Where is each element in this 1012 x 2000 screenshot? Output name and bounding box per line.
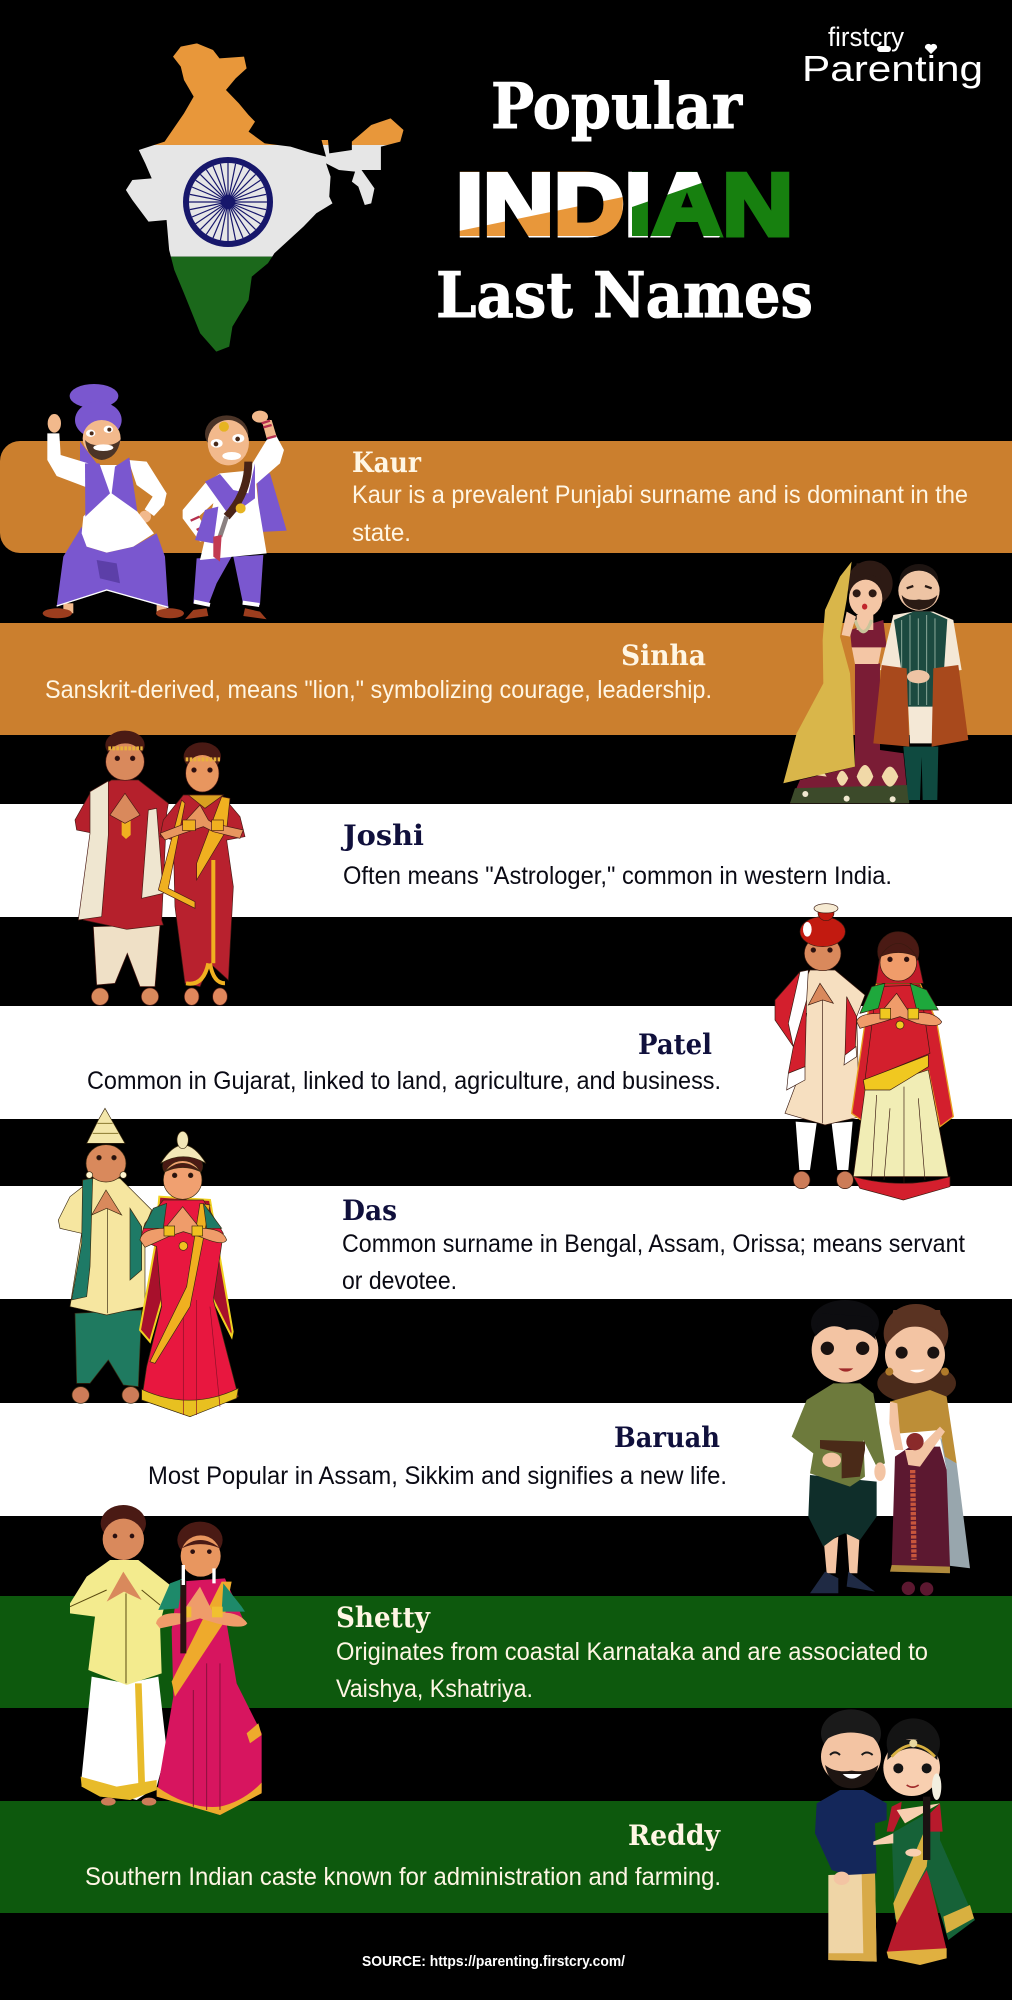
heading: Reddy: Reddy bbox=[628, 1819, 721, 1852]
man bbox=[873, 564, 968, 800]
title word: INDIAN: INDIAN bbox=[456, 155, 793, 254]
title: Last Names bbox=[436, 258, 813, 332]
logo: firstcry parenting: firstcry bbox=[828, 22, 904, 52]
panel: Joshi bbox=[0, 804, 1012, 917]
woman bbox=[877, 1304, 970, 1596]
woman bbox=[873, 1718, 975, 1965]
text: Reddy description: Southern Indian caste known for administration and farming. bbox=[85, 1863, 721, 1891]
illustration: Baruah couple bbox=[792, 1300, 970, 1596]
woman bbox=[783, 561, 909, 803]
woman bbox=[852, 932, 953, 1200]
man bbox=[75, 731, 168, 1005]
illustration: Reddy couple bbox=[815, 1709, 975, 1965]
man bbox=[775, 904, 865, 1189]
man bbox=[70, 1505, 170, 1806]
heading: Joshi: Joshi bbox=[340, 819, 424, 852]
logo: firstcry parenting: Parenting bbox=[802, 48, 983, 89]
man bbox=[815, 1709, 887, 1962]
text: Patel description: Common in Gujarat, linked to land, agriculture, and business. bbox=[87, 1067, 721, 1095]
panel: Kaur bbox=[0, 441, 1012, 553]
illustration: Sinha couple bbox=[783, 561, 968, 803]
heading: Sinha: Sinha bbox=[621, 639, 706, 672]
man bbox=[43, 384, 184, 618]
text: Baruah description: Most Popular in Assam, Sikkim and signifies a new life. bbox=[148, 1462, 727, 1490]
panel: Baruah bbox=[0, 1403, 1012, 1516]
illustration: Das couple bbox=[58, 1108, 238, 1417]
title bbox=[436, 69, 813, 332]
panel: Das bbox=[0, 1186, 1012, 1299]
India flag map bbox=[126, 43, 404, 352]
text: Das description: or devotee. bbox=[342, 1267, 457, 1295]
source: SOURCE: https://parenting.firstcry.com/ bbox=[362, 1953, 626, 1970]
title: Popular bbox=[491, 69, 743, 143]
panel: Reddy bbox=[0, 1801, 1012, 1913]
panel: Sinha bbox=[0, 623, 1012, 735]
icon: Ashoka Chakra bbox=[186, 160, 270, 244]
text: Shetty description: Vaishya, Kshatriya. bbox=[336, 1675, 533, 1703]
heading: Kaur: Kaur bbox=[352, 446, 422, 479]
man bbox=[792, 1300, 886, 1593]
text: Joshi description: Often means "Astrologer," common in western India. bbox=[343, 862, 892, 890]
panel: Patel bbox=[0, 1006, 1012, 1119]
illustration: Patel couple bbox=[775, 904, 953, 1200]
woman bbox=[158, 743, 245, 1005]
woman bbox=[183, 411, 287, 619]
man bbox=[58, 1108, 152, 1403]
heading: Das: Das bbox=[342, 1194, 397, 1227]
heading: Shetty: Shetty bbox=[336, 1601, 431, 1634]
text: Das description: Common surname in Bengal, Assam, Orissa; means servant bbox=[342, 1230, 965, 1258]
text: Shetty description: Originates from coastal Karnataka and are associated to bbox=[336, 1638, 928, 1666]
woman bbox=[156, 1522, 262, 1815]
panel: Shetty bbox=[0, 1596, 1012, 1708]
illustration: Punjabi couple bbox=[43, 384, 287, 619]
text: Kaur description: Kaur is a prevalent Punjabi surname and is dominant in the bbox=[352, 481, 968, 509]
heading: Patel: Patel bbox=[638, 1028, 712, 1061]
text: Kaur description: state. bbox=[352, 519, 411, 547]
woman bbox=[140, 1131, 238, 1417]
illustration: Joshi couple bbox=[75, 731, 245, 1005]
heading: Baruah: Baruah bbox=[614, 1421, 720, 1454]
illustration: Shetty couple bbox=[70, 1505, 262, 1815]
text: Sinha description: Sanskrit-derived, means "lion," symbolizing courage, leadership. bbox=[45, 676, 712, 704]
logo: firstcry parenting bbox=[802, 22, 983, 89]
